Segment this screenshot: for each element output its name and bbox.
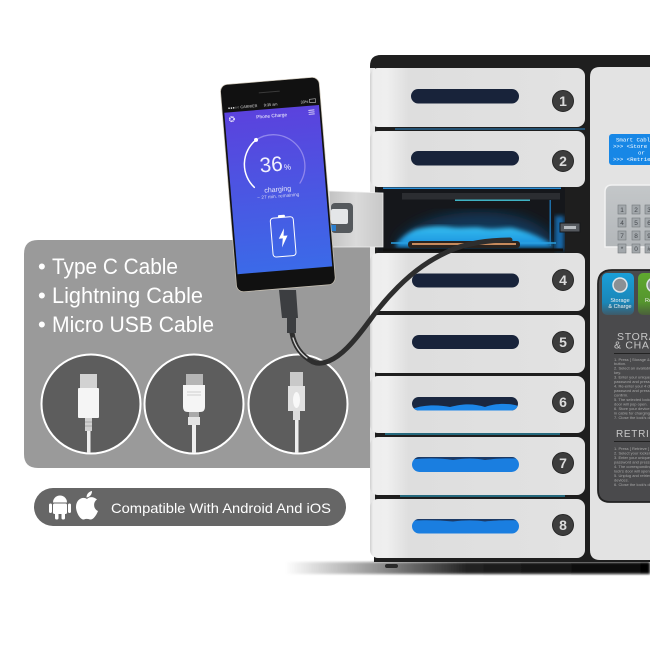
feature list: Micro USB Cable: [52, 312, 214, 337]
locker door 1: 1: [559, 93, 567, 109]
storage instructions: key.: [614, 370, 621, 375]
cabinet side strip: [370, 68, 375, 550]
locker door 7: [370, 437, 585, 495]
keypad: [605, 185, 650, 253]
feature list: [38, 254, 214, 337]
storage button: [602, 273, 634, 315]
locker door 2: 2: [559, 153, 567, 169]
icon: type C connector: [42, 354, 140, 454]
status bar: 9:35 am: [264, 102, 278, 107]
LCD screen: or: [638, 150, 645, 156]
grey feature panel: [24, 240, 372, 468]
icon: android: [49, 496, 71, 520]
feature list: Lightning Cable: [52, 283, 203, 308]
icon: apple: [76, 491, 98, 520]
LCD screen: [609, 134, 650, 165]
retrieve instructions: lock's door will open.: [614, 468, 650, 474]
battery percent: %: [284, 162, 291, 172]
locker door 8: 8: [559, 517, 567, 533]
storage instructions: door will pop open.: [614, 402, 648, 406]
cabinet top band: [370, 55, 650, 75]
icon: battery: [270, 214, 296, 257]
keypad: *: [621, 246, 624, 253]
storage instructions: 6. Store your device: [614, 406, 650, 411]
keypad: 4: [620, 220, 624, 227]
status bar: ●●●○○ CARRIER: [228, 104, 258, 110]
app header: Phone Charge: [256, 112, 288, 121]
compatibility text: Compatible With Android And iOS: [111, 500, 331, 516]
charging cable: [279, 240, 510, 363]
storage instructions: 3. Enter your unique: [614, 374, 650, 380]
keypad: 0: [634, 246, 638, 253]
keypad: 8: [634, 233, 638, 240]
storage button: Storage: [610, 298, 630, 304]
pulled-out drawer: [329, 191, 383, 247]
locker door 1: [370, 68, 585, 127]
locker door 7: 7: [559, 455, 567, 471]
icon: settings gear: [229, 117, 234, 122]
storage instructions: password and press: [614, 379, 650, 384]
cable plug: [279, 290, 298, 333]
floor shadow: [285, 562, 650, 574]
phone screen: [224, 105, 332, 274]
cabinet foot: [385, 564, 398, 568]
storage instructions: confirm.: [614, 392, 628, 398]
keypad: 5: [634, 220, 638, 227]
locker door 5: [370, 315, 585, 373]
charging status: charging: [264, 186, 292, 195]
retrieve instructions: devices.: [614, 478, 629, 482]
door gap cyan lines: [385, 434, 565, 496]
icon: menu: [308, 110, 315, 114]
locker door 4: [370, 253, 585, 311]
keypad: 7: [620, 233, 624, 240]
retrieve button: [638, 273, 650, 315]
icon: micro USB connector: [144, 354, 244, 454]
storage instructions: [614, 331, 650, 420]
open compartment 3: [378, 188, 580, 252]
retrieve instructions: password and press.: [614, 460, 650, 464]
locker door 6: 6: [559, 394, 567, 410]
locker door 2: [370, 131, 585, 187]
feature list: Type C Cable: [52, 254, 178, 279]
feature list: •: [38, 312, 46, 337]
storage instructions: button.: [614, 361, 626, 366]
compatibility pill: [34, 488, 346, 526]
locker door 5: 5: [559, 334, 567, 350]
status bar: 33%: [301, 100, 309, 104]
instruction panel: [598, 270, 650, 502]
smartphone: [220, 77, 336, 292]
locker door 8: [370, 499, 585, 558]
cabinet body: [374, 72, 650, 562]
retrieve instructions: [614, 429, 650, 487]
keypad: 2: [634, 207, 638, 214]
battery percent: 36: [259, 153, 284, 177]
phone speaker: [259, 91, 280, 93]
locker door 4: 4: [559, 272, 567, 288]
storage button: & Charge: [608, 304, 632, 310]
feature list: •: [38, 283, 46, 308]
keypad: 1: [620, 207, 624, 214]
LCD screen: >>> <Store: [613, 143, 648, 150]
door gap glow lines: [395, 128, 585, 130]
progress ring: [242, 132, 306, 188]
retrieve instructions: 3. Enter your unique: [614, 455, 650, 460]
storage instructions: password and press: [614, 388, 650, 393]
status bar: [228, 99, 316, 110]
locker door 6: [370, 376, 585, 433]
charging cabinet: [370, 55, 650, 568]
smartphone: ~ 27 min. remaining: [257, 192, 300, 201]
icon: lightning connector: [248, 354, 348, 454]
feature list: •: [38, 254, 46, 279]
control panel door: [590, 67, 650, 560]
